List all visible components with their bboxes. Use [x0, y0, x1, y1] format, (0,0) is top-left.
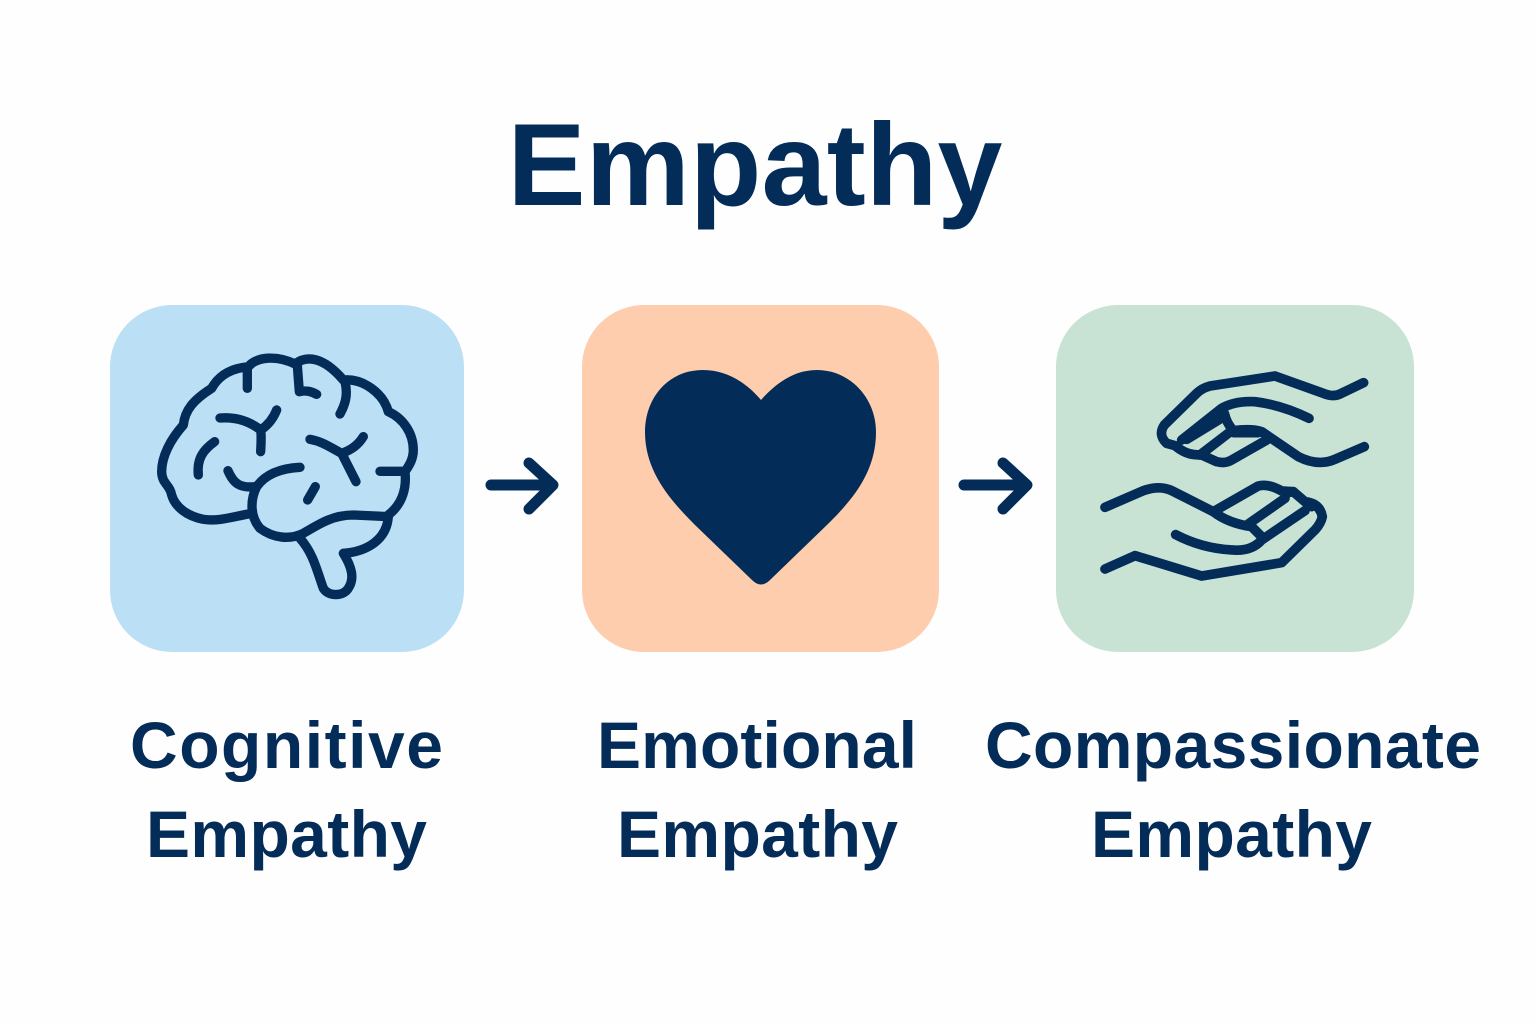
label: emotional empathy: Emotional [597, 708, 917, 782]
label: compassionate empathy: Compassionate [985, 708, 1481, 782]
label: cognitive empathy: Empathy [146, 797, 427, 871]
lower hand [1105, 485, 1322, 576]
panel: cognitive empathy card [110, 305, 464, 652]
label: cognitive empathy [130, 708, 443, 871]
icon: caring hands [1105, 376, 1364, 576]
label: emotional empathy [597, 708, 917, 871]
label: compassionate empathy [985, 708, 1481, 871]
label: compassionate empathy: Empathy [1091, 797, 1372, 871]
title: Empathy [508, 99, 1002, 230]
label: cognitive empathy: Cognitive [130, 708, 443, 782]
panel: compassionate empathy card [1056, 305, 1414, 652]
label: emotional empathy: Empathy [617, 797, 898, 871]
icon: heart [645, 370, 876, 584]
arrow: cognitive to emotional [491, 463, 553, 509]
panel: emotional empathy card [582, 305, 939, 652]
upper hand [1161, 376, 1364, 463]
arrow: emotional to compassionate [964, 463, 1027, 509]
icon: brain [162, 358, 413, 595]
